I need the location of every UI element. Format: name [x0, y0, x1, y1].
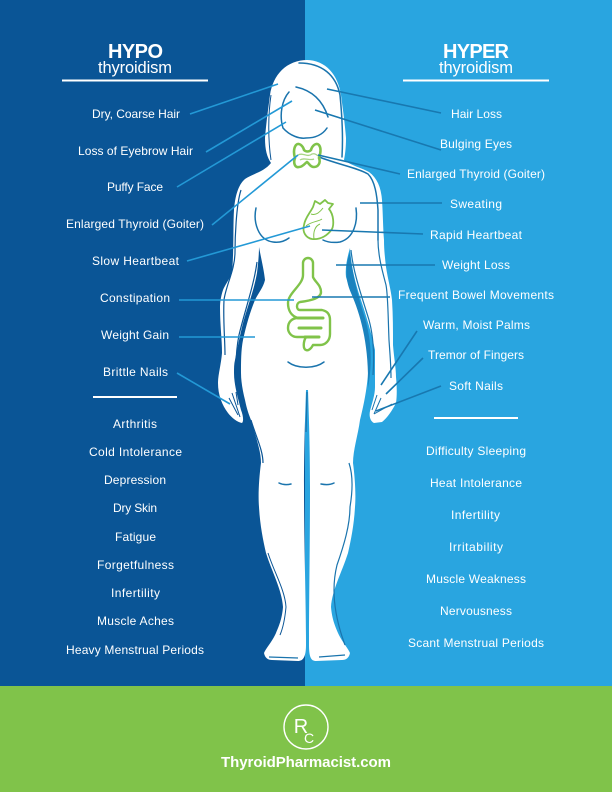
hypo symptom labels: Muscle Aches [97, 614, 174, 628]
hyper symptom labels: Rapid Heartbeat [430, 228, 523, 242]
hypo symptom labels: Arthritis [113, 417, 157, 431]
hyper symptom labels: Heat Intolerance [430, 476, 522, 490]
hyper symptom labels: Enlarged Thyroid (Goiter) [407, 167, 545, 181]
hypo symptom labels: Brittle Nails [103, 365, 168, 379]
hyper callout lines [312, 89, 442, 411]
hyper symptom labels: Irritability [449, 540, 503, 554]
hypo symptom labels: Puffy Face [107, 180, 163, 194]
hypo callout lines [177, 84, 310, 404]
hyper symptom labels: Difficulty Sleeping [426, 444, 526, 458]
hypo symptom labels: Cold Intolerance [89, 445, 182, 459]
hypo symptom labels: Enlarged Thyroid (Goiter) [66, 217, 204, 231]
hand finger lines [229, 392, 392, 417]
hyper symptom labels: Soft Nails [449, 379, 503, 393]
hypo symptom labels: Dry, Coarse Hair [92, 107, 180, 121]
hypo symptom labels: Infertility [111, 586, 160, 600]
hyper symptom labels: Infertility [451, 508, 500, 522]
icon: thyroid gland [294, 144, 321, 167]
hyper symptom labels: Frequent Bowel Movements [398, 288, 554, 302]
leg contour lines [251, 420, 352, 658]
heading: hypo [62, 41, 208, 82]
hyper symptom labels: Muscle Weakness [426, 572, 526, 586]
panel: hypothyroidism background [0, 0, 305, 686]
hypo symptom labels: Heavy Menstrual Periods [66, 643, 204, 657]
heading: hypo: HYPO [108, 41, 163, 63]
hypo symptom labels: Fatigue [115, 530, 156, 544]
panel: hyperthyroidism background [305, 0, 612, 686]
heading: hypo: thyroidism [98, 59, 172, 77]
hypo symptom labels: Loss of Eyebrow Hair [78, 144, 193, 158]
hyper symptom labels: Bulging Eyes [440, 137, 512, 151]
footer website text: ThyroidPharmacist.com [221, 754, 391, 771]
hyper symptom labels: Scant Menstrual Periods [408, 636, 544, 650]
icon: RC logo: R [294, 716, 308, 738]
hypo symptom labels: Constipation [100, 291, 170, 305]
heading: hyper: thyroidism [439, 59, 513, 77]
hypo symptom labels: Dry Skin [113, 501, 157, 515]
hypo symptom labels: Depression [104, 473, 166, 487]
icon: RC logo [284, 705, 328, 749]
hyper symptom labels: Sweating [450, 197, 502, 211]
icon: RC logo: C [304, 730, 314, 746]
hyper symptom labels: Weight Loss [442, 258, 510, 272]
hyper symptom labels: Nervousness [440, 604, 512, 618]
hair and face contour lines [269, 63, 342, 160]
shoulder and torso contour lines [224, 157, 391, 432]
hyper symptom labels: Tremor of Fingers [428, 348, 524, 362]
hyper symptom labels [398, 107, 554, 650]
hypo symptom labels [66, 107, 204, 657]
heading: hyper [403, 41, 549, 82]
icon: digestive tract [288, 258, 330, 350]
hyper symptom labels: Warm, Moist Palms [423, 318, 530, 332]
panel: footer band [0, 686, 612, 792]
hypo symptom labels: Slow Heartbeat [92, 254, 180, 268]
icon: heart [303, 200, 333, 239]
heading: hyper: HYPER [443, 41, 510, 63]
body silhouette [218, 60, 397, 661]
hypo symptom labels: Weight Gain [101, 328, 169, 342]
hyper symptom labels: Hair Loss [451, 107, 502, 121]
hypo symptom labels: Forgetfulness [97, 558, 174, 572]
